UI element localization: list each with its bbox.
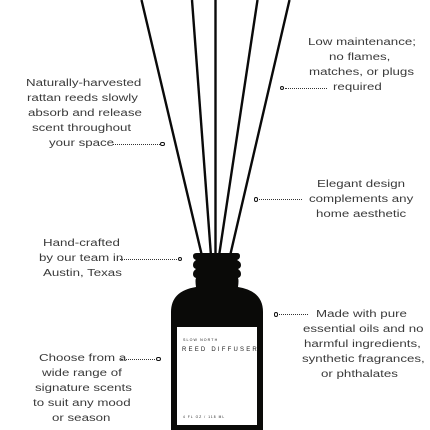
callout: pure ingredients: or phthalates bbox=[321, 369, 398, 380]
callout: hand-crafted bbox=[39, 238, 182, 279]
callout: natural reeds: rattan reeds slowly bbox=[27, 93, 138, 104]
callout: low maintenance: Low maintenance; bbox=[308, 37, 416, 48]
volume: 4 FL OZ / 118 ML bbox=[183, 415, 225, 419]
callout: elegant design: complements any bbox=[309, 194, 414, 205]
callout: elegant design: home aesthetic bbox=[316, 209, 406, 220]
callout: scent range: wide range of bbox=[42, 368, 122, 379]
callout: scent range: Choose from a bbox=[39, 353, 126, 364]
callout: scent range: to suit any mood bbox=[33, 398, 131, 409]
callout: pure ingredients: synthetic fragrances, bbox=[302, 354, 424, 365]
callout: natural reeds bbox=[26, 78, 165, 149]
callout: pure ingredients: Made with pure bbox=[316, 309, 407, 320]
callout: scent range bbox=[33, 353, 161, 424]
callout: hand-crafted: Hand-crafted bbox=[43, 238, 120, 249]
label text bbox=[182, 338, 259, 419]
callout: natural reeds: your space bbox=[49, 138, 114, 149]
callout: elegant design bbox=[254, 179, 414, 220]
callout: hand-crafted: by our team in bbox=[39, 253, 124, 264]
product name: REED DIFFUSER bbox=[182, 347, 259, 353]
reeds bbox=[140, 0, 291, 253]
callout: low maintenance bbox=[280, 37, 416, 93]
callout: hand-crafted: Austin, Texas bbox=[43, 268, 122, 279]
callout: natural reeds: scent throughout bbox=[32, 123, 131, 134]
callout: scent range: or season bbox=[52, 413, 111, 424]
callout: low maintenance: required bbox=[333, 82, 382, 93]
callout: low maintenance: no flames, bbox=[329, 52, 390, 63]
callout: natural reeds: Naturally-harvested bbox=[26, 78, 141, 89]
callout: pure ingredients: harmful ingredients, bbox=[304, 339, 421, 350]
callout: scent range: signature scents bbox=[35, 383, 132, 394]
callout: low maintenance: matches, or plugs bbox=[309, 67, 414, 78]
callout: natural reeds: absorb and release bbox=[28, 108, 142, 119]
brand name: SLOW NORTH bbox=[183, 338, 218, 342]
callout: elegant design: Elegant design bbox=[317, 179, 405, 190]
callout: pure ingredients: essential oils and no bbox=[303, 324, 424, 335]
